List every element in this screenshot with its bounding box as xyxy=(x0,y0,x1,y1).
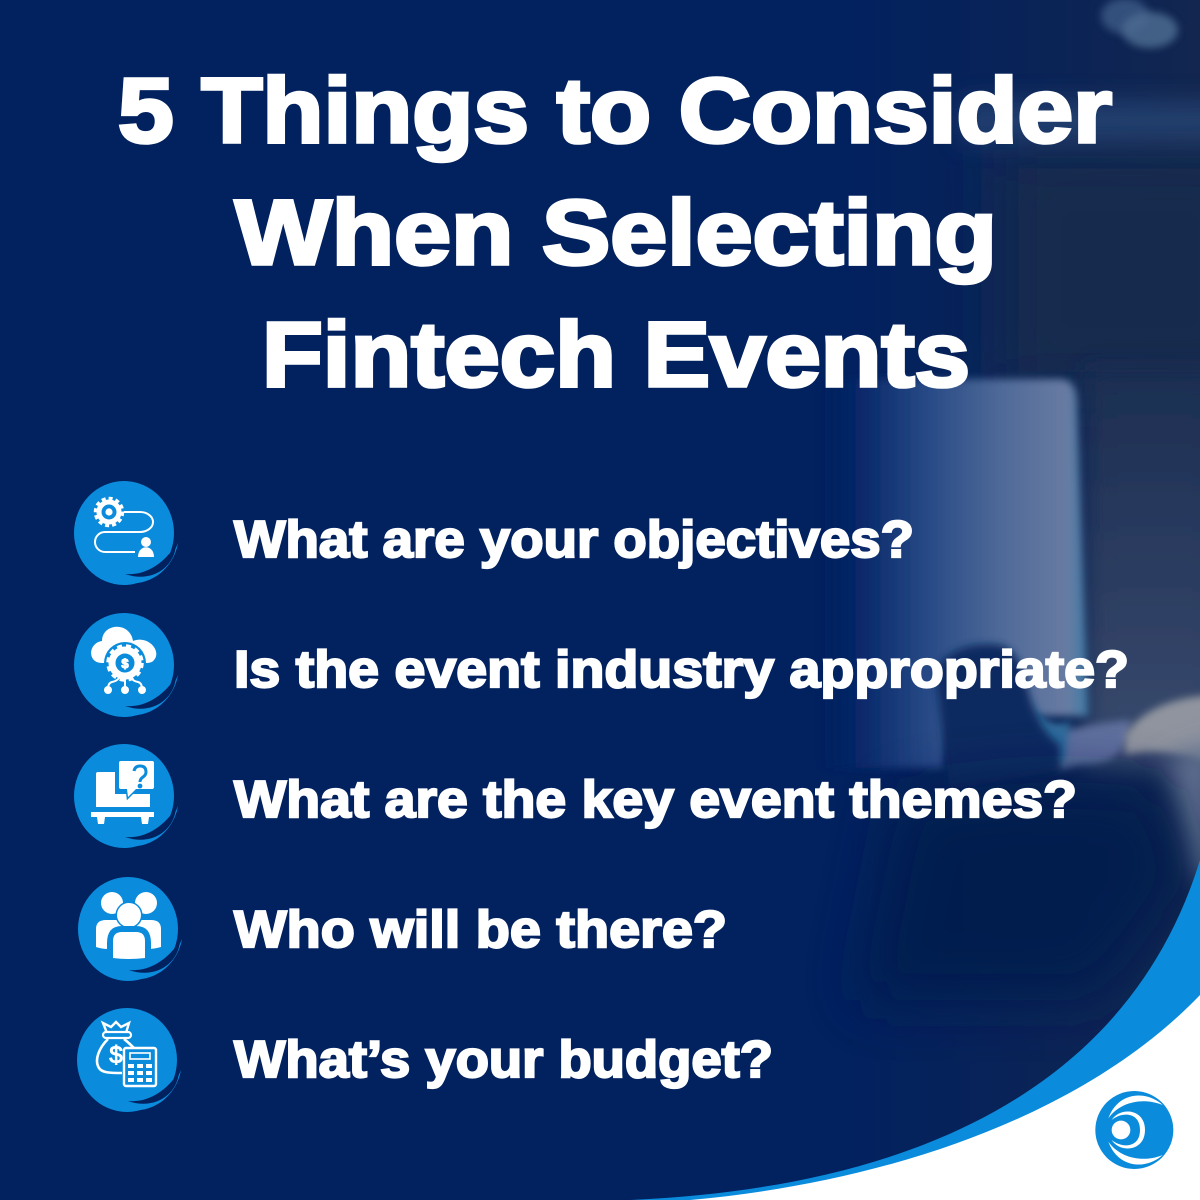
title: 5 Things to Consider xyxy=(118,60,1112,162)
corner sweep: blue band xyxy=(630,860,1200,1200)
list: questions: What’s your budget? xyxy=(234,1031,773,1089)
icon: cloud with gear xyxy=(74,613,178,717)
icon: cloud with gear: $ xyxy=(121,656,129,671)
corner sweep: white area xyxy=(690,995,1200,1200)
icon: money bag and calculator xyxy=(77,1008,181,1112)
list: questions: Is the event industry appropriate? xyxy=(234,641,1129,699)
list: questions: What are your objectives? xyxy=(234,511,914,569)
title: When Selecting xyxy=(235,182,997,284)
list: questions: Who will be there? xyxy=(234,901,727,959)
icon: money bag and calculator: $ xyxy=(109,1042,123,1069)
icon: group of people xyxy=(78,877,182,981)
icon: objectives roadmap xyxy=(74,481,178,585)
icon: presentation desk with question xyxy=(74,744,178,848)
title: Fintech Events xyxy=(262,304,970,406)
logo xyxy=(1095,1091,1173,1169)
background: blurred event photo xyxy=(854,0,1200,1096)
list: questions: What are the key event themes? xyxy=(234,771,1077,829)
title xyxy=(118,60,1112,406)
list: questions xyxy=(234,511,1129,1089)
